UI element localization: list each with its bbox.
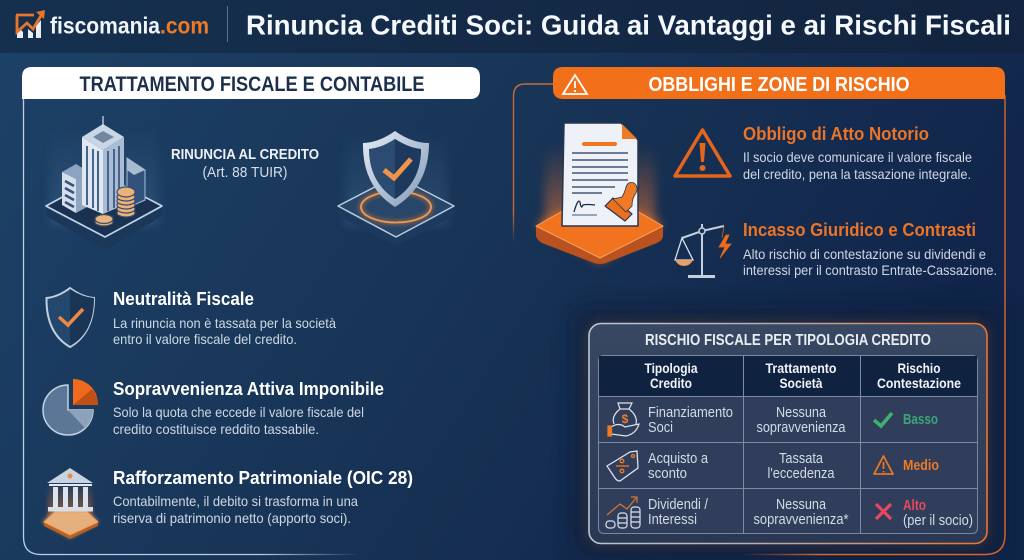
item: sopravvenienza attiva imponibile (43, 378, 384, 437)
row: finanziamento soci: Basso (903, 412, 938, 428)
item: rafforzamento patrimoniale: Contabilmente, il debito si trasforma in una (113, 493, 358, 509)
row: acquisto a sconto: sconto (648, 466, 687, 482)
item: neutralita fiscale: Neutralità Fiscale (113, 288, 254, 309)
row: finanziamento soci: Soci (648, 420, 673, 436)
panel heading: TRATTAMENTO FISCALE E CONTABILE (80, 73, 424, 96)
icon: money bag in hand (608, 403, 639, 436)
row: acquisto a sconto: Acquisto a (648, 451, 709, 467)
icon: logo bars and arrow (16, 10, 45, 38)
item: obbligo di atto notorio: Obbligo di Atto Notorio (743, 123, 929, 144)
row: finanziamento soci (608, 403, 938, 436)
item: incasso giuridico e contrasti: Incasso Giuridico e Contrasti (743, 219, 976, 240)
label: rinuncia al credito (171, 147, 319, 181)
item: neutralita fiscale: entro il valore fiscale del credito. (113, 331, 297, 347)
row: dividendi interessi: sopravvenienza* (754, 512, 849, 528)
item: sopravvenienza attiva imponibile: credito costituisce reddito tassabile. (113, 421, 319, 437)
row: dividendi interessi: Nessuna (776, 497, 827, 513)
panel: obblighi e zone di rischio (514, 67, 1005, 554)
icon: warning (675, 130, 730, 176)
row: acquisto a sconto: Tassata (779, 451, 824, 467)
item: rafforzamento patrimoniale: Rafforzamento Patrimoniale (OIC 28) (113, 467, 413, 488)
icon: buildings and coins on platform (46, 116, 162, 250)
item: incasso giuridico e contrasti: interessi per il contrasto Entrate-Cassazione. (743, 262, 997, 278)
table header: Contestazione (877, 375, 961, 391)
logo (16, 10, 209, 38)
logo: fiscomania (50, 12, 160, 38)
icon: coins and rising arrow (606, 497, 640, 528)
row: dividendi interessi (606, 497, 973, 529)
item: rafforzamento patrimoniale: riserva di patrimonio netto (apporto soci). (113, 510, 351, 526)
row: acquisto a sconto (607, 451, 939, 482)
item: incasso giuridico e contrasti (675, 219, 997, 278)
logo: .com (160, 12, 209, 38)
item: obbligo di atto notorio: del credito, pena la tassazione integrale. (743, 166, 971, 182)
table header: Società (780, 375, 823, 391)
row: finanziamento soci: sopravvenienza (756, 420, 846, 436)
icon: pie chart (43, 379, 98, 435)
item: rafforzamento patrimoniale (42, 467, 413, 539)
icon: shield (46, 288, 94, 347)
icon: bank on glowing platform (42, 468, 99, 539)
item: sopravvenienza attiva imponibile: Solo la quota che eccede il valore fiscale del (113, 404, 364, 420)
item: neutralita fiscale: La rinuncia non è tassata per la società (113, 315, 336, 331)
title: Rinuncia Crediti Soci: Guida ai Vantaggi e ai Rischi Fiscali (246, 10, 1011, 40)
row: dividendi interessi: (per il socio) (903, 513, 973, 529)
icon: document with stamp on orange platform (536, 123, 663, 264)
icon: orange warning (874, 456, 893, 474)
icon: scales and lightning (675, 224, 731, 278)
item: incasso giuridico e contrasti: Alto rischio di contestazione su dividendi e (743, 246, 986, 262)
row: finanziamento soci: Nessuna (776, 405, 827, 421)
icon: warning triangle (563, 75, 587, 94)
row: dividendi interessi: Alto (903, 498, 926, 514)
row: acquisto a sconto: Medio (903, 458, 939, 474)
icon: shield on platform (338, 130, 454, 246)
label: rinuncia al credito: RINUNCIA AL CREDITO (171, 147, 319, 163)
row: dividendi interessi: Dividendi / (648, 497, 709, 513)
row: acquisto a sconto: l'eccedenza (768, 466, 835, 482)
table header: Tipologia (644, 360, 698, 376)
panel heading (553, 67, 1005, 99)
header bar (0, 0, 1024, 53)
item: sopravvenienza attiva imponibile: Sopravvenienza Attiva Imponibile (113, 378, 384, 399)
item: obbligo di atto notorio: Il socio deve comunicare il valore fiscale (743, 149, 972, 165)
table header (644, 360, 961, 391)
item: obbligo di atto notorio (675, 123, 972, 182)
label: rinuncia al credito: (Art. 88 TUIR) (202, 165, 288, 181)
icon: green check (874, 413, 892, 426)
panel heading (22, 67, 480, 99)
row: dividendi interessi: Interessi (648, 512, 697, 528)
table header: Credito (650, 375, 692, 391)
table (598, 356, 978, 534)
table title: RISCHIO FISCALE PER TIPOLOGIA CREDITO (645, 332, 931, 349)
icon: red cross (876, 504, 891, 519)
row: finanziamento soci: Finanziamento (648, 405, 733, 421)
panel: trattamento fiscale e contabile (22, 67, 480, 554)
table header: Rischio (898, 360, 940, 376)
panel: rischio fiscale per tipologia credito (589, 324, 987, 544)
item: neutralita fiscale (46, 288, 336, 347)
icon: discount tag (607, 451, 638, 481)
icon: money bag in hand: $ (622, 412, 629, 426)
panel heading: OBBLIGHI E ZONE DI RISCHIO (648, 74, 910, 96)
table header: Trattamento (766, 360, 836, 376)
